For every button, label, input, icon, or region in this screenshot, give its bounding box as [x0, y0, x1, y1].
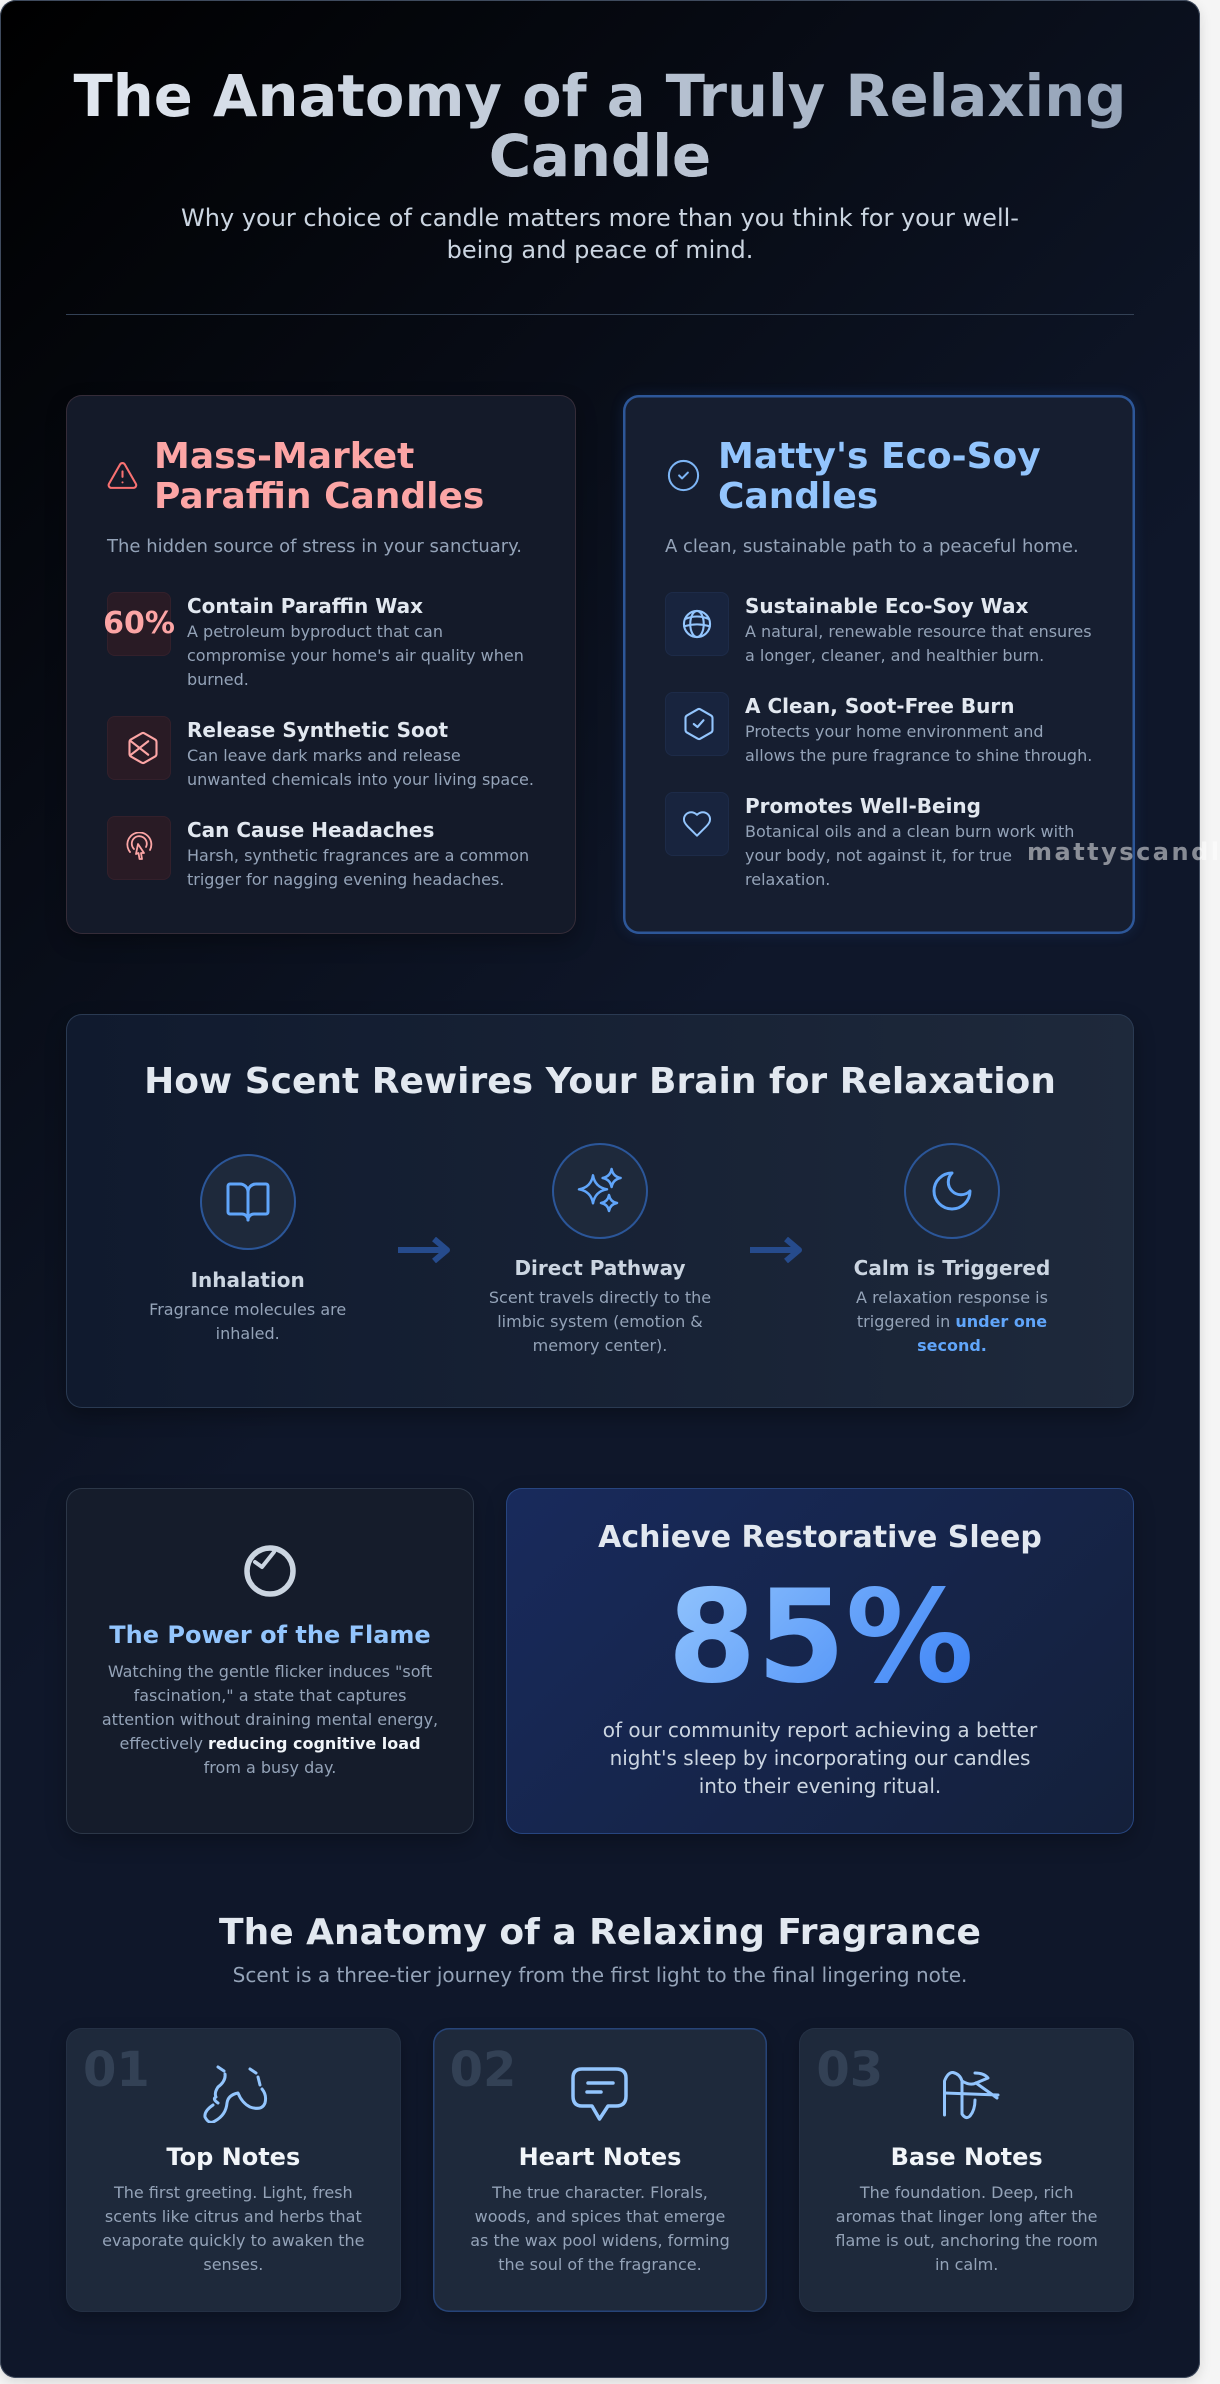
step description [489, 1288, 711, 1354]
step: calm is triggered [854, 1143, 1050, 1354]
card description: attention without draining mental energy, [102, 1710, 438, 1728]
card description: aromas that linger long after the [836, 2206, 1098, 2226]
icon: warning triangle [108, 462, 138, 489]
card description: fascination," a state that captures [134, 1686, 406, 1704]
card heading: Achieve Restorative Sleep [598, 1520, 1042, 1555]
card number: 01 [83, 2042, 150, 2098]
icon: open book [200, 1154, 296, 1250]
subtitle: Why your choice of candle matters more than you think for your well- [181, 204, 1019, 232]
item description: eco-soy wax: A natural, renewable resource that ensures [745, 622, 1092, 641]
step description: inhaled. [216, 1324, 280, 1342]
item title: eco-soy wax: Sustainable Eco-Soy Wax [745, 594, 1028, 618]
item title: headaches: Can Cause Headaches [187, 818, 434, 842]
section heading: fragrance: The Anatomy of a Relaxing Fragrance [219, 1912, 981, 1952]
step description: limbic system (emotion & [497, 1312, 703, 1330]
card description: Watching the gentle flicker induces "soft [108, 1662, 432, 1680]
panel heading: Candles [718, 476, 878, 517]
item description: soot-free burn [745, 722, 1092, 765]
icon: heart [665, 792, 729, 856]
stat description [603, 1718, 1038, 1798]
panel: matty's eco-soy candles [623, 395, 1135, 934]
icon: hexagon x [107, 716, 171, 780]
step title: Direct Pathway [514, 1256, 686, 1280]
card title: Top Notes [166, 2143, 300, 2171]
title: Candle [489, 123, 711, 190]
panel: how scent rewires your brain [66, 1014, 1134, 1408]
item description: paraffin wax: A petroleum byproduct that can [187, 622, 443, 641]
panel heading [154, 436, 484, 517]
section subtitle: fragrance: Scent is a three-tier journey from the first light to the final lingering note. [233, 1963, 967, 1987]
step description: memory center). [533, 1336, 667, 1354]
card description: The true character. Florals, [492, 2182, 708, 2202]
card description [102, 1662, 438, 1776]
card description: evaporate quickly to awaken the [102, 2230, 364, 2250]
item description: soot-free burn: Protects your home environment and [745, 722, 1044, 741]
item description: soot: unwanted chemicals into your living space. [187, 770, 534, 789]
icon: flame ring [244, 1545, 296, 1597]
item description: soot [187, 746, 534, 789]
item title: well-being: Promotes Well-Being [745, 794, 981, 818]
panel heading [718, 436, 1041, 517]
step description: Fragrance molecules are [149, 1300, 346, 1318]
item description: eco-soy wax: a longer, cleaner, and healthier burn. [745, 646, 1044, 665]
item description: well-being [745, 822, 1074, 889]
item description: paraffin wax: compromise your home's air quality when [187, 646, 524, 665]
step description [856, 1288, 1048, 1354]
card: top notes [66, 2028, 401, 2312]
item title: paraffin wax: Contain Paraffin Wax [187, 594, 423, 618]
card number: 03 [816, 2042, 883, 2098]
card title: Heart Notes [519, 2143, 681, 2171]
title [66, 67, 1134, 187]
card description: in calm. [935, 2254, 998, 2274]
card description: effectively reducing cognitive load [119, 1734, 421, 1752]
card number: 02 [450, 2042, 516, 2098]
item title: soot-free burn: A Clean, Soot-Free Burn [745, 694, 1015, 718]
card description: The first greeting. Light, fresh [114, 2182, 353, 2202]
card: heart notes [433, 2028, 767, 2312]
card description: the soul of the fragrance. [498, 2254, 702, 2274]
step: inhalation [149, 1154, 346, 1342]
icon: check circle [668, 460, 700, 492]
panel subtitle: The hidden source of stress in your sanctuary. [107, 536, 522, 556]
icon: pointer target [107, 816, 171, 880]
card description [470, 2182, 730, 2274]
step title: Inhalation [191, 1268, 305, 1292]
panel subtitle: A clean, sustainable path to a peaceful home. [665, 536, 1079, 556]
item description: headaches: trigger for nagging evening headaches. [187, 870, 504, 889]
stat box: 60%: 60% [103, 606, 175, 641]
item description: well-being: relaxation. [745, 870, 830, 889]
item description: paraffin wax [187, 622, 524, 689]
panel: restorative sleep stat [506, 1488, 1134, 1834]
item description: soot-free burn: allows the pure fragrance to shine through. [745, 746, 1092, 765]
step description: triggered in under one [857, 1312, 1047, 1330]
icon: hexagon check [665, 692, 729, 756]
arrow: step 2 to 3 [750, 1237, 802, 1263]
subtitle: being and peace of mind. [447, 236, 753, 264]
step description [149, 1300, 346, 1342]
panel: power of the flame [66, 1488, 474, 1834]
icon: base notes [943, 2071, 1000, 2120]
panel heading: Paraffin Candles [154, 476, 484, 517]
step description: A relaxation response is [856, 1288, 1048, 1306]
section heading: How Scent Rewires Your Brain for Relaxation [144, 1061, 1056, 1102]
step: direct pathway [489, 1143, 711, 1354]
item description: headaches [187, 846, 529, 889]
step description: Scent travels directly to the [489, 1288, 711, 1306]
card: base notes [799, 2028, 1134, 2312]
item description: soot: Can leave dark marks and release [187, 746, 461, 765]
stat description: of our community report achieving a better [603, 1718, 1037, 1742]
card title: The Power of the Flame [109, 1621, 431, 1649]
card description: senses. [203, 2254, 263, 2274]
item description: headaches: Harsh, synthetic fragrances are a common [187, 846, 529, 865]
card description: woods, and spices that emerge [475, 2206, 725, 2226]
icon: message bubble [571, 2067, 628, 2121]
item title: soot: Release Synthetic Soot [187, 718, 448, 742]
step title: Calm is Triggered [854, 1256, 1050, 1280]
stat box: 60% [107, 592, 171, 656]
panel heading: Matty's Eco-Soy [718, 436, 1041, 477]
card description [835, 2182, 1098, 2274]
item description: eco-soy wax [745, 622, 1092, 665]
big stat: 85%: 85% [668, 1563, 974, 1712]
panel: mass-market paraffin candles [66, 395, 576, 934]
step description: second. [917, 1336, 987, 1354]
title: The Anatomy of a Truly Relaxing [74, 63, 1126, 130]
card description: The foundation. Deep, rich [860, 2182, 1073, 2202]
card description: as the wax pool widens, forming [470, 2230, 730, 2250]
icon: sparkles [552, 1143, 648, 1239]
item description: well-being: your body, not against it, for true [745, 846, 1012, 865]
item description: paraffin wax: burned. [187, 670, 249, 689]
subtitle [181, 204, 1019, 264]
arrow: step 1 to 2 [398, 1237, 450, 1263]
item description: well-being: Botanical oils and a clean burn work with [745, 822, 1074, 841]
stat description: night's sleep by incorporating our candles [610, 1746, 1030, 1770]
card description: flame is out, anchoring the room [835, 2230, 1098, 2250]
card description: scents like citrus and herbs that [105, 2206, 362, 2226]
card description [102, 2182, 364, 2274]
card title: Base Notes [891, 2143, 1043, 2171]
panel heading: Mass-Market [154, 436, 414, 477]
icon: top notes [203, 2065, 268, 2123]
card description: from a busy day. [204, 1758, 336, 1776]
icon: moon [904, 1143, 1000, 1239]
stat description: into their evening ritual. [699, 1774, 941, 1798]
icon: globe [665, 592, 729, 656]
